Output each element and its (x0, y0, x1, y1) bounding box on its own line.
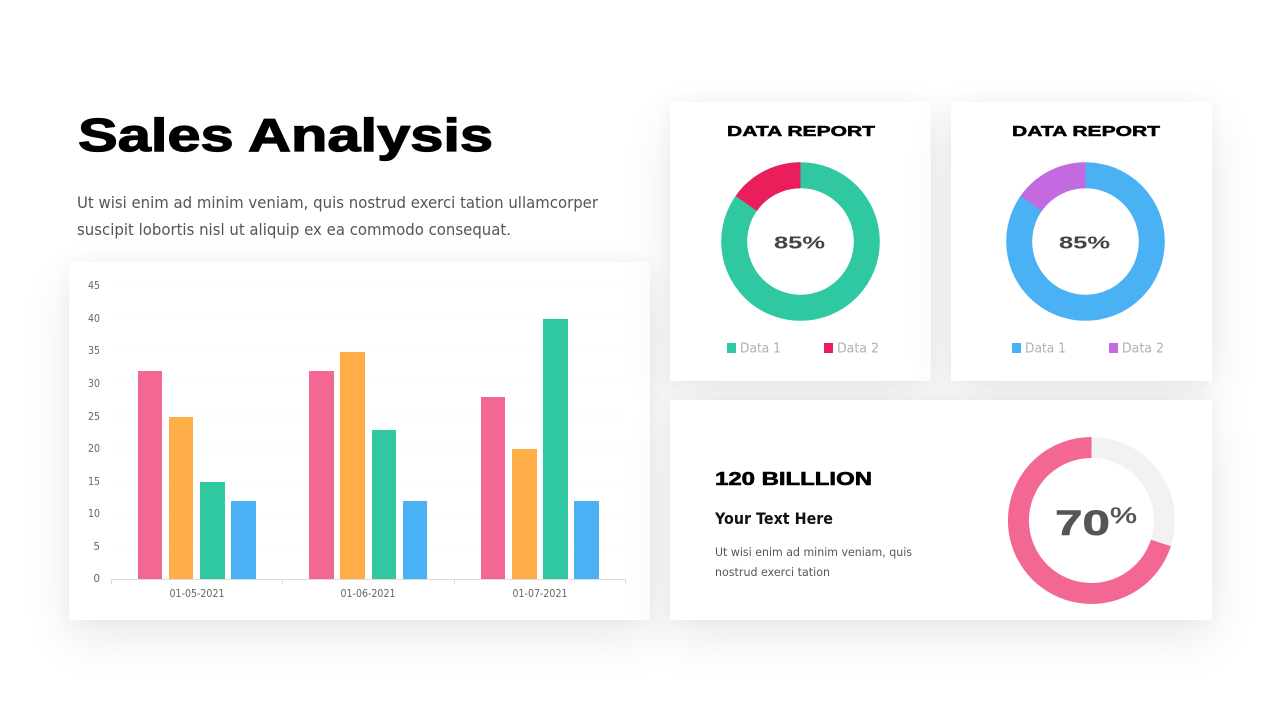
ring value: 70 (1055, 504, 1110, 543)
description: nostrud exerci tation (715, 565, 830, 579)
donut value: 85% (774, 232, 826, 252)
panel: bar chart (69, 262, 650, 620)
y axis labels: 20 (88, 443, 100, 455)
description: Ut wisi enim ad minim veniam, quis (715, 545, 912, 559)
chart gridlines (111, 285, 626, 546)
y axis labels: 0 (93, 573, 100, 585)
y axis labels: 40 (88, 313, 100, 325)
x axis (111, 579, 626, 584)
y axis labels: 30 (88, 378, 100, 390)
panel: data report green (670, 102, 931, 381)
y axis labels: 35 (88, 345, 100, 357)
x axis labels: 01-05-2021 (170, 588, 224, 600)
y axis labels: 25 (88, 411, 100, 423)
donut chart (734, 175, 867, 308)
heading: DATA REPORT (727, 124, 875, 140)
x axis labels (170, 588, 568, 600)
y axis labels: 10 (88, 508, 100, 520)
y axis labels: 45 (88, 280, 100, 292)
y axis labels (88, 280, 100, 585)
legend: Data 1 (1025, 340, 1066, 356)
bars: 01-07-2021 (481, 319, 599, 579)
panel: data report blue (951, 102, 1212, 381)
x axis labels: 01-07-2021 (512, 588, 568, 600)
intro paragraph (77, 193, 598, 239)
legend: Data 1 (740, 340, 781, 356)
ring value (1055, 503, 1137, 543)
title: Sales Analysis (78, 109, 493, 161)
progress ring (1018, 448, 1164, 594)
legend (1012, 340, 1164, 356)
description (715, 545, 912, 579)
y axis labels: 15 (88, 476, 100, 488)
donut value: 85% (1059, 232, 1111, 252)
bars: 01-05-2021 (138, 371, 256, 579)
bars: 01-06-2021 (309, 352, 427, 579)
legend (727, 340, 879, 356)
y axis labels: 5 (93, 541, 100, 553)
ring value: % (1110, 503, 1137, 528)
stat heading: 120 BILLLION (715, 469, 872, 489)
heading: DATA REPORT (1012, 124, 1160, 140)
subheading: Your Text Here (714, 509, 833, 528)
intro paragraph: Ut wisi enim ad minim veniam, quis nostrud exerci tation ullamcorper (77, 193, 598, 212)
donut chart (1019, 175, 1152, 308)
legend: Data 2 (1122, 340, 1164, 356)
intro paragraph: suscipit lobortis nisl ut aliquip ex ea commodo consequat. (77, 220, 511, 239)
legend: Data 2 (837, 340, 879, 356)
x axis labels: 01-06-2021 (340, 588, 396, 600)
panel: 120 billion summary (670, 400, 1212, 620)
title and intro text (77, 109, 598, 239)
